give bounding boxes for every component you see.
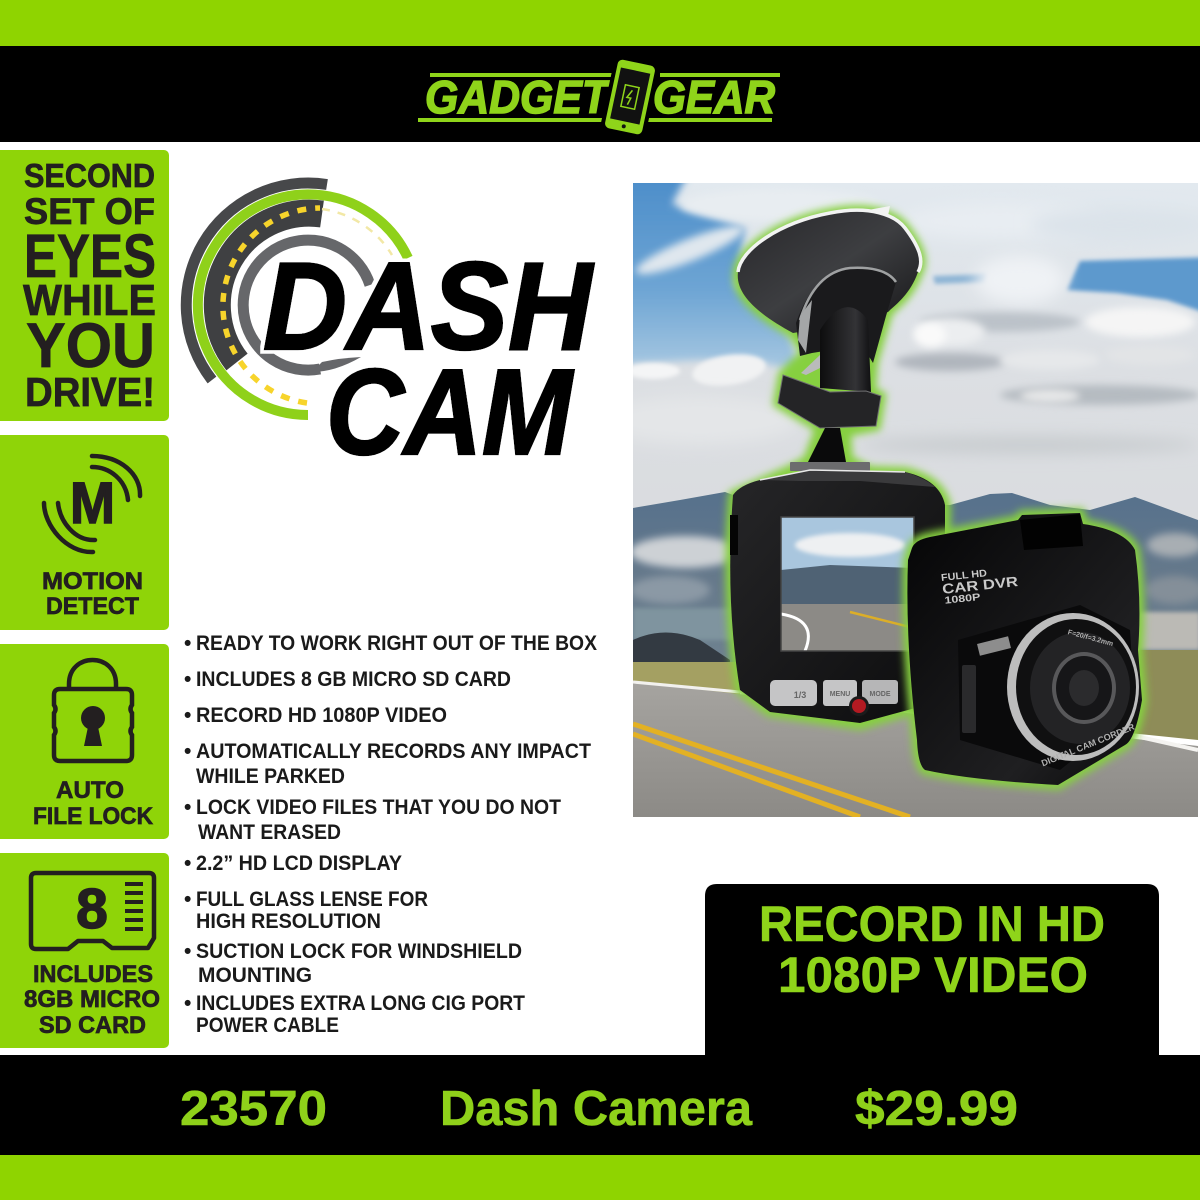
panel: second set of eyes: SET OF — [24, 190, 155, 232]
feature list: AUTOMATICALLY RECORDS ANY IMPACT — [196, 740, 591, 763]
suction cup — [738, 210, 921, 333]
camera buttons: MENU — [830, 691, 850, 698]
front panel — [958, 605, 1135, 770]
feature list: • — [184, 632, 191, 655]
feature list: INCLUDES EXTRA LONG CIG PORT — [196, 992, 525, 1015]
icon: micro sd card: 8 — [76, 877, 108, 941]
feature list: MOUNTING — [198, 964, 312, 987]
callout: record in hd: 1080P VIDEO — [778, 947, 1088, 1003]
panel: auto file lock — [0, 644, 169, 839]
feature list: • — [184, 668, 191, 691]
panel: second set of eyes: DRIVE! — [25, 369, 155, 415]
logo: Gadget Gear: GEAR — [653, 71, 775, 123]
title: dash cam: CAM — [326, 344, 574, 480]
camera buttons: MODE — [870, 691, 891, 698]
feature list: • — [184, 796, 191, 819]
camera text: FULL HD — [941, 568, 987, 584]
icon: micro sd card — [31, 873, 154, 949]
camera text — [941, 570, 1018, 604]
lens: F=20/f=3.2mm — [1067, 629, 1114, 648]
panel: second set of eyes: YOU — [26, 311, 155, 381]
panel: includes 8gb micro sd card: SD CARD — [39, 1012, 146, 1039]
blue sky patches — [620, 170, 1200, 372]
feature list: • — [184, 888, 191, 911]
feature list: • — [184, 940, 191, 963]
sensor housing — [1020, 514, 1083, 550]
panel: includes 8gb micro sd card: 8GB MICRO — [24, 986, 160, 1013]
bottom green band — [0, 1155, 1200, 1200]
clouds — [600, 189, 1200, 453]
dash cam rear with mount — [730, 206, 946, 725]
panel: motion detect: DETECT — [46, 593, 139, 620]
panel: includes 8gb micro sd card: INCLUDES — [33, 961, 153, 988]
lens: DIGITAL CAM CORDER — [1040, 722, 1137, 768]
icon: padlock — [54, 660, 132, 761]
camera text: CAR DVR — [941, 573, 1019, 597]
feature list: POWER CABLE — [196, 1014, 339, 1037]
title: dash cam — [263, 238, 594, 480]
feature list: LOCK VIDEO FILES THAT YOU DO NOT — [196, 796, 561, 819]
item number: 23570 — [180, 1082, 327, 1136]
top black header — [0, 46, 1200, 142]
mountains — [633, 492, 1198, 670]
callout: record in hd — [705, 884, 1159, 1056]
feature list: HIGH RESOLUTION — [196, 910, 381, 933]
top green band — [0, 0, 1200, 46]
panel: auto file lock: AUTO — [56, 777, 124, 804]
feature list: INCLUDES 8 GB MICRO SD CARD — [196, 668, 511, 691]
feature list: 2.2” HD LCD DISPLAY — [196, 852, 402, 875]
dash cam front — [907, 513, 1142, 785]
icon: motion waves: M — [70, 471, 115, 536]
feature list: • — [184, 740, 191, 763]
panel: second set of eyes: EYES — [24, 222, 156, 290]
feature list: FULL GLASS LENSE FOR — [196, 888, 428, 911]
body — [907, 513, 1142, 785]
grass — [633, 662, 740, 695]
logo: dash cam road graphic — [186, 183, 408, 415]
camera screen — [781, 517, 914, 651]
panel: auto file lock: FILE LOCK — [33, 803, 154, 830]
feature list: • — [184, 992, 191, 1015]
road — [633, 682, 1198, 817]
camera buttons — [770, 680, 898, 716]
panel: second set of eyes: WHILE — [23, 276, 156, 325]
feature list: SUCTION LOCK FOR WINDSHIELD — [196, 940, 522, 963]
locking ring — [778, 375, 881, 428]
road yellow lines — [633, 724, 910, 817]
icon: phone — [600, 55, 660, 139]
neck — [808, 428, 846, 462]
feature list — [184, 632, 597, 1037]
feature list: • — [184, 704, 191, 727]
feature list: RECORD HD 1080P VIDEO — [196, 704, 447, 727]
glow — [907, 513, 1142, 785]
feature list: READY TO WORK RIGHT OUT OF THE BOX — [196, 632, 597, 655]
camera body — [730, 470, 945, 723]
panel: motion detect: MOTION — [42, 568, 143, 595]
logo: Gadget Gear: GADGET — [425, 71, 612, 123]
footer black band — [0, 1055, 1200, 1155]
camera buttons: 1/3 — [794, 690, 806, 700]
ball joint — [820, 307, 871, 392]
panel: second set of eyes — [0, 150, 169, 421]
title: dash cam: DASH — [263, 238, 594, 376]
glow — [730, 210, 946, 725]
price: $29.99 — [855, 1082, 1018, 1136]
camera text: 1080P — [944, 592, 981, 607]
product name: Dash Camera — [440, 1082, 753, 1136]
mount arm — [796, 268, 896, 363]
feature list: WANT ERASED — [198, 821, 341, 844]
logo: Gadget Gear — [418, 55, 780, 139]
feature list: • — [184, 852, 191, 875]
feature list: WHILE PARKED — [196, 765, 345, 788]
panel: includes 8gb micro sd card — [0, 853, 169, 1048]
photo: road and sky with dash cam — [600, 170, 1200, 817]
icon: motion waves — [44, 456, 140, 552]
sky — [633, 183, 1198, 520]
panel: motion detect — [0, 435, 169, 630]
lens — [1007, 613, 1139, 768]
callout: record in hd: RECORD IN HD — [759, 896, 1105, 952]
panel: second set of eyes: SECOND — [24, 158, 155, 195]
